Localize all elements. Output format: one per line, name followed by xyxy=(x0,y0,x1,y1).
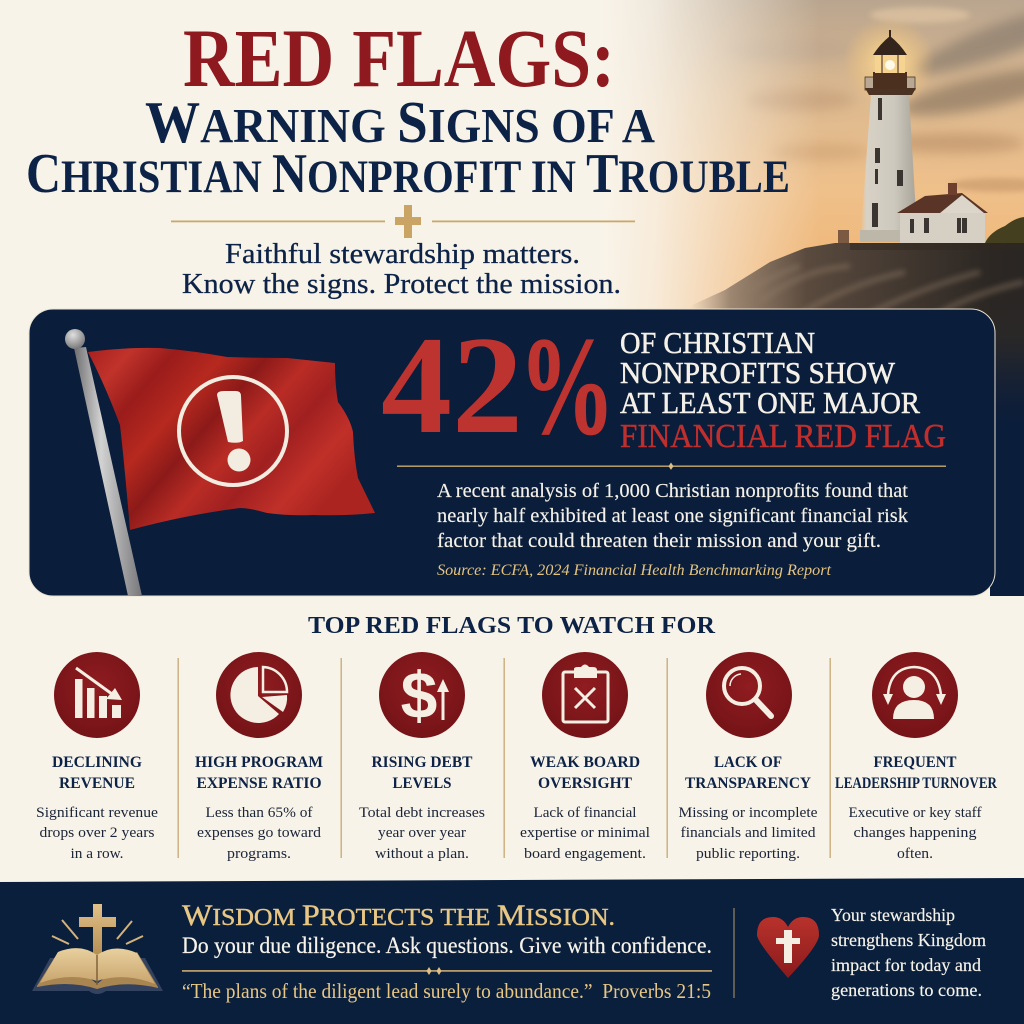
statistic label: FINANCIAL RED FLAG xyxy=(620,418,946,455)
title line: Christian Nonprofit in Trouble: CHRISTIAN NONPROFIT IN TROUBLE xyxy=(26,143,790,205)
flag item: rising debt levels xyxy=(359,652,485,862)
heading xyxy=(685,754,811,792)
description: expertise or minimal xyxy=(520,825,650,841)
icon: dollar with up arrow xyxy=(379,652,465,738)
description: programs. xyxy=(227,846,291,862)
description: changes happening xyxy=(854,825,977,841)
closing note: generations to come. xyxy=(831,980,982,1000)
lantern xyxy=(875,53,905,73)
flag item: weak board oversight xyxy=(520,652,650,862)
statistic label: OF CHRISTIAN xyxy=(620,325,815,360)
description xyxy=(520,805,650,862)
gallery railing xyxy=(865,77,915,90)
heading: top red flags: TOP RED FLAGS TO WATCH FOR xyxy=(308,613,716,639)
tower xyxy=(861,95,917,232)
description xyxy=(36,805,158,862)
heading: LACK OF xyxy=(714,754,782,771)
icon: dollar with up arrow: $ xyxy=(401,658,437,732)
heading xyxy=(52,754,143,792)
heading: FREQUENT xyxy=(874,754,957,771)
description xyxy=(197,805,322,862)
heading: OVERSIGHT xyxy=(538,775,632,792)
gold divider xyxy=(397,462,946,470)
heading xyxy=(835,754,997,792)
icon: heart with cross xyxy=(757,917,819,978)
description: year over year xyxy=(378,825,466,841)
tagline line 2: Know the signs. Protect the mission. xyxy=(182,268,621,300)
fade of the photo into the cream page xyxy=(600,0,805,308)
description xyxy=(848,805,982,862)
heading: WEAK BOARD xyxy=(530,754,640,771)
heading: TRANSPARENCY xyxy=(685,775,811,792)
panel: 42 percent statistic xyxy=(29,308,995,596)
description: without a plan. xyxy=(375,846,469,862)
tagline xyxy=(182,238,621,300)
closing note: strengthens Kingdom xyxy=(831,930,986,950)
description: Less than 65% of xyxy=(206,805,313,821)
windows xyxy=(872,98,903,227)
description xyxy=(359,805,485,862)
description: drops over 2 years xyxy=(40,825,155,841)
description: nearly half exhibited at least one significant financial risk xyxy=(437,505,909,527)
statistic: 42% xyxy=(381,308,615,464)
title line: Red Flags: RED FLAGS: xyxy=(183,12,615,104)
scripture quote: “The plans of the diligent lead surely to abundance.” Proverbs 21:5 xyxy=(182,979,711,1003)
description: A recent analysis of 1,000 Christian nonprofits found that xyxy=(437,480,908,502)
flag item: declining revenue xyxy=(36,652,158,862)
closing note: impact for today and xyxy=(831,955,981,975)
icon: open Bible with cross xyxy=(32,904,163,994)
icon: pie chart xyxy=(216,652,302,738)
heading: RISING DEBT xyxy=(372,754,473,771)
description: public reporting. xyxy=(696,846,800,862)
footer subheading: Do your due diligence. Ask questions. Give with confidence. xyxy=(182,933,712,959)
divider with cross xyxy=(171,205,635,238)
description: board engagement. xyxy=(524,846,646,862)
description: factor that could threaten their mission and your gift. xyxy=(437,530,881,552)
bushes xyxy=(985,217,1024,243)
tagline line 1: Faithful stewardship matters. xyxy=(225,238,580,270)
photo: lighthouse at sunset xyxy=(600,0,1024,596)
icon: magnifying glass xyxy=(706,652,792,738)
heading: EXPENSE RATIO xyxy=(196,775,322,792)
closing note xyxy=(831,905,986,1000)
statistic label xyxy=(620,325,946,455)
title xyxy=(26,12,790,205)
statistic: 42%: % xyxy=(519,309,615,464)
statistic: 42%: 42 xyxy=(381,308,523,463)
description: financials and limited xyxy=(680,825,816,841)
heading: LEVELS xyxy=(392,775,452,792)
heading xyxy=(195,754,323,792)
description: expenses go toward xyxy=(197,825,322,841)
statistic label: NONPROFITS SHOW xyxy=(620,355,896,390)
description: in a row. xyxy=(70,846,124,862)
description: Missing or incomplete xyxy=(678,805,818,821)
description: Significant revenue xyxy=(36,805,158,821)
description: often. xyxy=(897,846,933,862)
house xyxy=(900,213,985,243)
icon: clipboard with X xyxy=(542,652,628,738)
description xyxy=(678,805,818,862)
description: Lack of financial xyxy=(534,805,636,821)
description xyxy=(437,480,909,552)
flag item: high program expense ratio xyxy=(195,652,323,862)
heading: REVENUE xyxy=(59,775,135,792)
footer heading: WISDOM PROTECTS THE MISSION. xyxy=(182,899,615,932)
heading: HIGH PROGRAM xyxy=(195,754,323,771)
flag item: frequent leadership turnover xyxy=(835,652,997,862)
heading xyxy=(530,754,640,792)
source: Source: ECFA, 2024 Financial Health Benchmarking Report xyxy=(437,562,832,579)
description: Total debt increases xyxy=(359,805,485,821)
heading xyxy=(372,754,473,792)
flag item: lack of transparency xyxy=(678,652,818,862)
description: Executive or key staff xyxy=(848,805,982,821)
statistic label: AT LEAST ONE MAJOR xyxy=(620,385,920,420)
icon: declining bars xyxy=(54,652,140,738)
footer banner xyxy=(0,878,1024,1024)
rocky headland xyxy=(690,243,1024,320)
icon: person with rotation arrows xyxy=(872,652,958,738)
title line: Warning Signs of a: WARNING SIGNS OF A xyxy=(145,89,656,155)
closing note: Your stewardship xyxy=(831,905,955,925)
heading: DECLINING xyxy=(52,754,143,771)
icon: red flag with warning mark xyxy=(65,329,375,596)
